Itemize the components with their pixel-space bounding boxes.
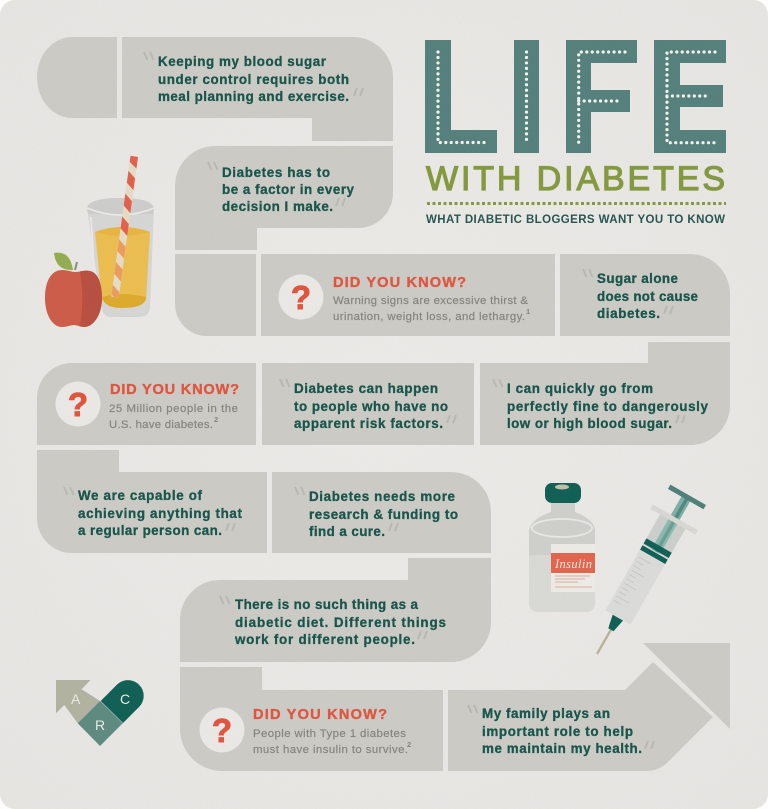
panel: did you know type 1	[180, 667, 443, 771]
logo: ARC: C	[120, 691, 130, 707]
panel: did you know warning signs	[261, 254, 555, 336]
panel: risk factors quote: Diabetes can happen	[294, 381, 438, 396]
panel: sugar alone quote: diabetes.	[597, 306, 660, 321]
panel: capable quote: We are capable of	[78, 488, 203, 503]
panel: blood sugar swing quote	[480, 342, 730, 445]
panel: did you know warning signs: Warning signs are excessive thirst &	[333, 295, 528, 307]
panel: blood sugar swing quote: I can quickly go from	[507, 381, 653, 396]
logo arrow A	[56, 680, 100, 723]
panel: did you know warning signs: 1	[526, 307, 530, 316]
icon: question mark: ?	[68, 386, 88, 423]
panel: did you know type 1: People with Type 1 diabetes	[253, 728, 406, 740]
panel: did you know 25 million: 2	[214, 415, 218, 424]
panel: connector	[175, 254, 256, 336]
title: LIFE	[425, 40, 726, 153]
panel: factor quote: Diabetes has to	[222, 165, 330, 180]
icon: insulin vial	[529, 483, 595, 612]
panel: risk factors quote: apparent risk factors.	[294, 416, 443, 431]
panel: sugar alone quote: does not cause	[597, 289, 698, 304]
panel: did you know 25 million: DID YOU KNOW?	[110, 382, 239, 398]
panel: factor quote: decision I make.	[222, 199, 333, 214]
icon: juice glass	[87, 156, 154, 317]
tagline: WHAT DIABETIC BLOGGERS WANT YOU TO KNOW	[426, 214, 725, 226]
arrow head	[643, 643, 730, 729]
logo: ARC	[56, 680, 144, 746]
panel: did you know warning signs: urination, weight loss, and lethargy.	[333, 311, 525, 323]
panel: capable quote	[37, 450, 267, 553]
icon: question mark	[278, 274, 324, 320]
panel: diabetic diet quote: There is no such thing as a	[235, 597, 419, 612]
panel: blood sugar swing quote: low or high blood sugar.	[507, 416, 672, 431]
letter I	[514, 40, 539, 153]
panel: family arrow quote: me maintain my health.	[482, 741, 642, 756]
panel: first stub	[37, 37, 117, 118]
panel: diabetic diet quote: work for different people.	[234, 632, 415, 647]
panel: research quote: find a cure.	[309, 524, 385, 539]
panel: factor quote: be a factor in every	[222, 182, 355, 197]
panel: capable quote: achieving anything that	[78, 506, 243, 521]
panel: risk factors quote: to people who have no	[294, 399, 448, 414]
panel: research quote: research & funding to	[309, 507, 458, 522]
letter L	[425, 40, 497, 153]
panel: did you know 25 million: 25 Million people in the	[109, 403, 238, 415]
icon: syringe	[574, 482, 711, 667]
logo diamond R	[78, 701, 123, 746]
panel: did you know 25 million	[37, 363, 256, 445]
logo pill C	[101, 680, 144, 723]
panel: did you know type 1: must have insulin to survive.	[253, 744, 408, 756]
icon: question mark	[56, 382, 100, 426]
icon: question mark: ?	[212, 712, 232, 749]
panel: research quote	[272, 472, 491, 553]
panel: blood sugar quote: meal planning and exercise.	[158, 89, 349, 104]
dotted divider	[427, 202, 726, 205]
panel: family arrow quote	[448, 662, 713, 771]
icon: question mark: ?	[291, 279, 311, 316]
panel: diabetic diet quote	[180, 558, 491, 662]
panel: factor quote	[175, 146, 393, 250]
panel: blood sugar swing quote: perfectly fine to dangerously	[507, 399, 709, 414]
panel: risk factors quote	[262, 363, 474, 445]
letter E	[654, 40, 726, 153]
panel: capable quote: a regular person can.	[78, 523, 222, 538]
panel: sugar alone quote	[560, 254, 730, 336]
subtitle: with diabetes: WITH DIABETES	[426, 160, 725, 198]
panel: family arrow quote: important role to help	[482, 724, 633, 739]
label: Insulin	[554, 557, 592, 571]
panel: blood sugar quote: Keeping my blood sugar	[158, 54, 327, 69]
panel: research quote: Diabetes needs more	[309, 489, 455, 504]
panel: did you know 25 million: U.S. have diabetes.	[109, 419, 213, 431]
panel: did you know type 1: 2	[407, 740, 411, 749]
icon: question mark	[200, 708, 244, 752]
logo: ARC: A	[71, 691, 81, 707]
straw	[111, 156, 138, 301]
panel: sugar alone quote: Sugar alone	[597, 271, 678, 286]
letter F	[566, 40, 637, 153]
panel: family arrow quote: My family plays an	[482, 706, 610, 721]
panel: diabetic diet quote: diabetic diet. Different things	[235, 615, 446, 630]
panel: did you know type 1: DID YOU KNOW?	[253, 707, 387, 723]
panel: blood sugar quote: under control requires both	[158, 72, 349, 87]
panel: blood sugar quote	[122, 37, 393, 141]
logo: ARC: R	[95, 717, 105, 733]
panel: did you know warning signs: DID YOU KNOW?	[333, 275, 466, 291]
icon: apple	[45, 253, 102, 327]
